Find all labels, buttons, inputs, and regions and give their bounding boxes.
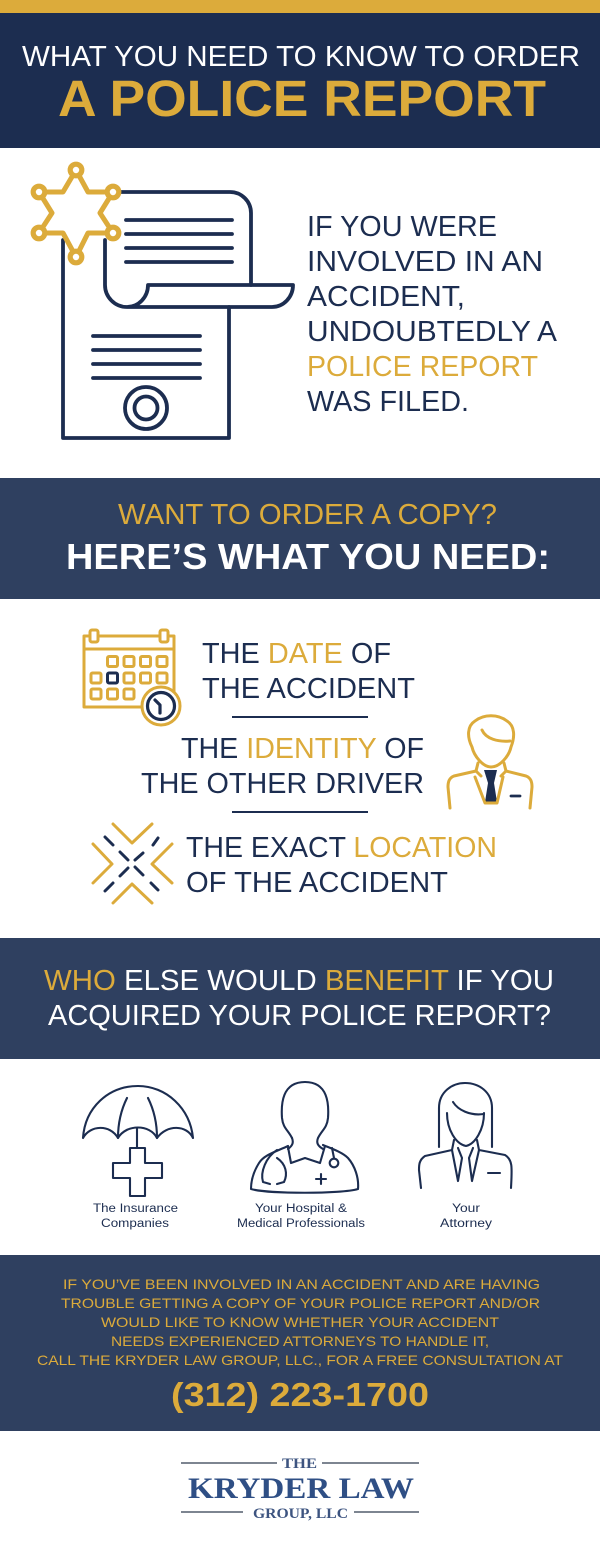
text: date of the accident: THE ACCIDENT bbox=[202, 673, 415, 705]
call to action banner: NEEDS EXPERIENCED ATTORNEYS TO HANDLE IT, bbox=[111, 1333, 489, 1349]
icon: umbrella and medical cross bbox=[83, 1086, 193, 1196]
call to action banner: (312) 223-1700 bbox=[171, 1376, 429, 1413]
logo: GROUP, LLC bbox=[253, 1506, 348, 1522]
icon: female attorney bbox=[419, 1083, 512, 1188]
caption: attorney: Attorney bbox=[440, 1218, 492, 1230]
text: identity of the other driver: THE OTHER DRIVER bbox=[141, 768, 424, 800]
text: exact location bbox=[186, 832, 497, 899]
banner: who else would benefit: WHO ELSE WOULD BENEFIT IF YOU bbox=[44, 965, 554, 997]
caption: insurance: The Insurance bbox=[93, 1203, 178, 1215]
logo: KRYDER LAW bbox=[188, 1472, 414, 1505]
call to action banner: IF YOU’VE BEEN INVOLVED IN AN ACCIDENT AND ARE HAVING bbox=[63, 1276, 540, 1292]
caption: hospital: Your Hospital & bbox=[255, 1203, 347, 1215]
icon: police report document with sheriff badge bbox=[33, 164, 293, 438]
icon: doctor bbox=[251, 1082, 358, 1193]
intro text bbox=[307, 211, 558, 418]
intro text: IF YOU WERE bbox=[307, 211, 497, 243]
intro text: INVOLVED IN AN bbox=[307, 246, 543, 278]
banner: who else would benefit bbox=[0, 938, 600, 1059]
caption: insurance bbox=[93, 1203, 178, 1230]
title banner: WHAT YOU NEED TO KNOW TO ORDER bbox=[22, 41, 580, 73]
caption: hospital bbox=[237, 1203, 365, 1230]
top gold strip bbox=[0, 0, 600, 13]
caption: insurance: Companies bbox=[101, 1218, 169, 1230]
text: exact location: THE EXACT LOCATION bbox=[186, 832, 497, 864]
banner: what you need: HERE’S WHAT YOU NEED: bbox=[66, 536, 550, 577]
logo bbox=[181, 1456, 419, 1522]
icon: calendar and clock bbox=[84, 630, 180, 725]
icon: man in suit bbox=[448, 716, 532, 808]
text: identity of the other driver: THE IDENTITY OF bbox=[181, 733, 424, 765]
text: date of the accident: THE DATE OF bbox=[202, 638, 391, 670]
text: exact location: OF THE ACCIDENT bbox=[186, 867, 448, 899]
banner: what you need: WANT TO ORDER A COPY? bbox=[118, 499, 497, 531]
banner: who else would benefit: ACQUIRED YOUR POLICE REPORT? bbox=[48, 1000, 551, 1032]
intro text: POLICE REPORT bbox=[307, 351, 538, 383]
text: date of the accident bbox=[202, 638, 415, 705]
call to action banner: CALL THE KRYDER LAW GROUP, LLC., FOR A FREE CONSULTATION AT bbox=[37, 1352, 563, 1368]
logo: THE bbox=[282, 1456, 317, 1472]
title banner bbox=[0, 13, 600, 148]
intro text: ACCIDENT, bbox=[307, 281, 465, 313]
text: identity of the other driver bbox=[141, 733, 424, 800]
call to action banner: WOULD LIKE TO KNOW WHETHER YOUR ACCIDENT bbox=[101, 1314, 500, 1330]
caption: attorney: Your bbox=[452, 1203, 480, 1215]
call to action banner: TROUBLE GETTING A COPY OF YOUR POLICE REPORT AND/OR bbox=[61, 1295, 540, 1311]
icon: location arrows bbox=[93, 824, 172, 903]
icon: sheriff badge bbox=[33, 164, 119, 263]
intro text: WAS FILED. bbox=[307, 386, 469, 418]
caption: attorney bbox=[440, 1203, 492, 1230]
call to action banner bbox=[0, 1255, 600, 1431]
intro text: UNDOUBTEDLY A bbox=[307, 316, 558, 348]
title banner: A POLICE REPORT bbox=[58, 70, 546, 127]
caption: hospital: Medical Professionals bbox=[237, 1218, 365, 1230]
banner: what you need bbox=[0, 478, 600, 599]
